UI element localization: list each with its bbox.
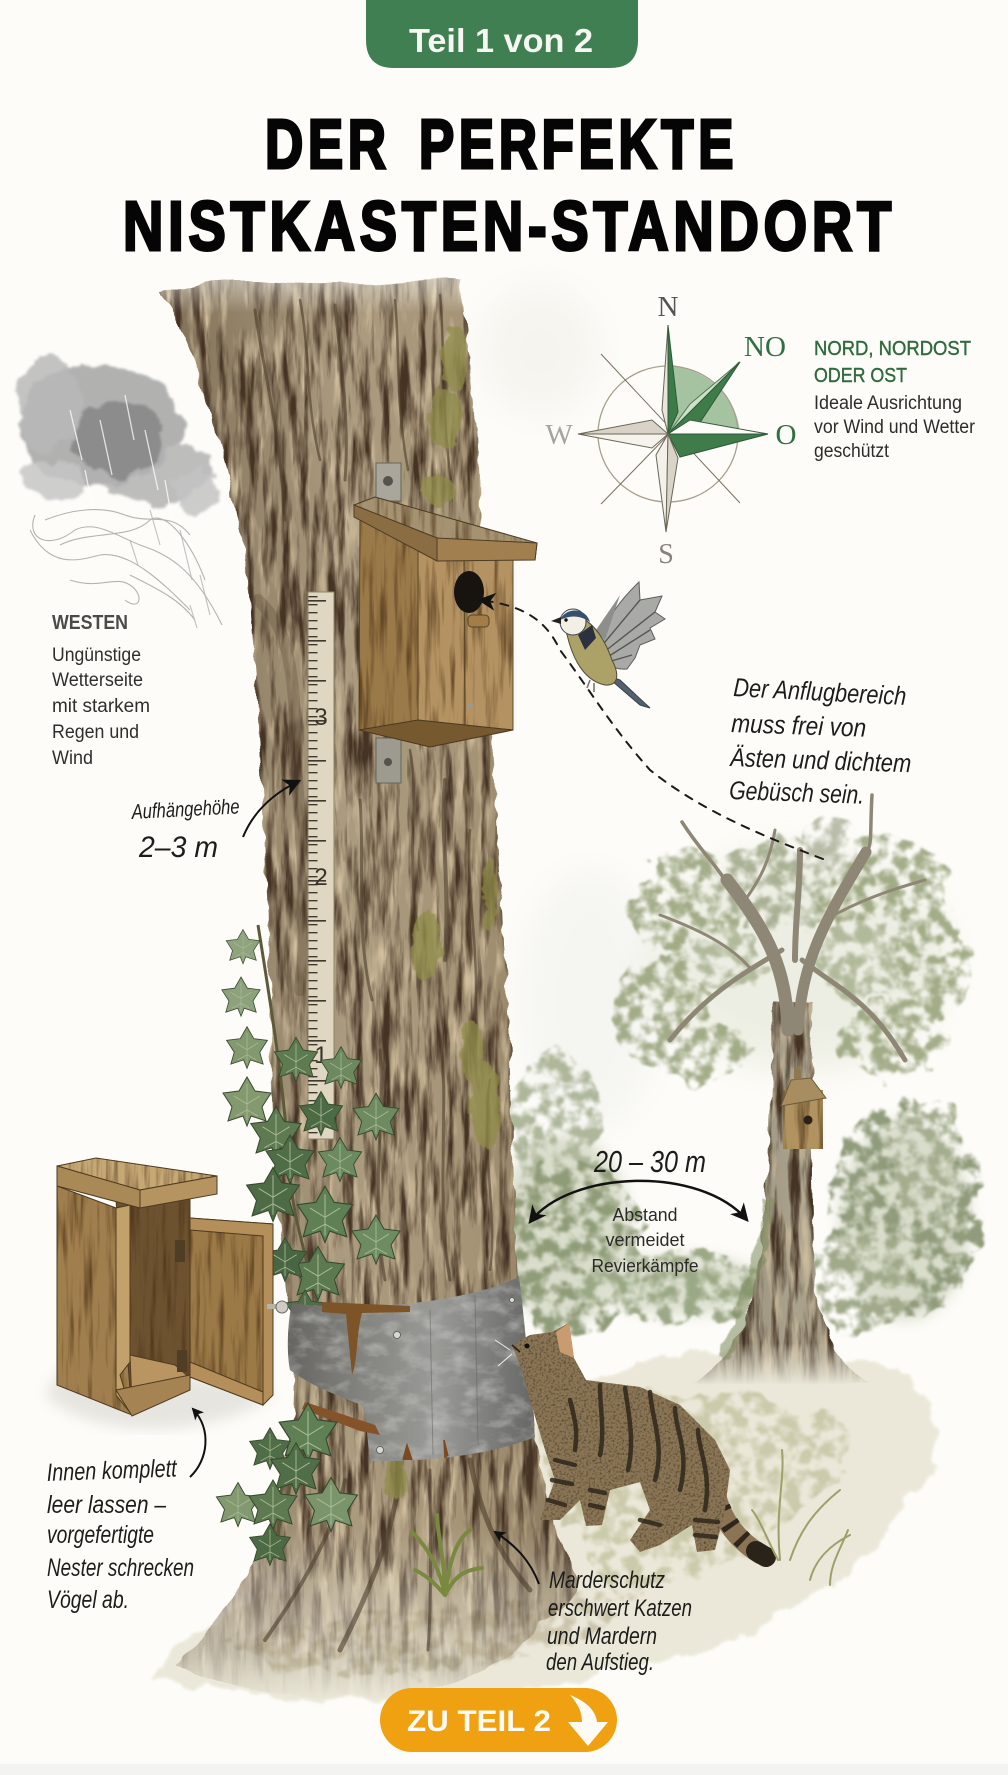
moss patches: [385, 328, 501, 1500]
note: marten guard with arrow: und Mardern: [547, 1623, 657, 1650]
metal marten guard: [288, 1277, 535, 1461]
part badge: [366, 0, 638, 68]
note: marten guard with arrow: [495, 1532, 692, 1676]
open door: [190, 1218, 273, 1405]
text: ideal orientation: [814, 338, 976, 462]
compass rose: [545, 291, 796, 570]
rain streaks: [70, 395, 172, 520]
cat stripes: [548, 1385, 718, 1537]
main nest box: [354, 463, 537, 783]
icon: arrow down: [568, 1695, 608, 1746]
distance arc with labels: vermeidet: [606, 1230, 684, 1250]
door hinge: [175, 1240, 187, 1372]
note: mounting height with arrow: [129, 781, 299, 864]
note: mounting height with arrow: Aufhängehöhe: [129, 795, 240, 824]
box roof: [57, 1158, 217, 1190]
tree canopy: [612, 818, 970, 1088]
base grass tuft: [412, 1515, 482, 1595]
note: keep empty with arrow: leer lassen –: [47, 1491, 167, 1519]
cardinal letters: O: [776, 419, 796, 451]
bottom bracket: [376, 738, 401, 783]
wing: [598, 582, 665, 669]
distance arc with labels: [530, 1144, 747, 1276]
cardinal letters: S: [658, 539, 674, 570]
head: [560, 609, 586, 635]
text: ideal orientation: Ideale Ausrichtung: [814, 393, 962, 414]
wind and rain cloud: [18, 357, 222, 628]
note: keep empty with arrow: vorgefertigte: [47, 1521, 154, 1549]
wind swirls: [30, 510, 222, 625]
note: approach area: muss frei von: [731, 708, 867, 743]
tree trunk and branches: [660, 795, 925, 1385]
text: west side: Ungünstige: [52, 645, 141, 666]
text: ideal orientation: NORD, NORDOST: [814, 338, 971, 360]
cloud: [18, 357, 219, 514]
door knob: [267, 1301, 288, 1313]
tail: [605, 675, 650, 708]
note: mounting height with arrow: 2–3 m: [138, 831, 218, 864]
note: marten guard with arrow: den Aufstieg.: [546, 1649, 654, 1676]
text: ideal orientation: ODER OST: [814, 365, 907, 387]
part badge: Teil 1 von 2: [409, 22, 593, 59]
body: [566, 618, 617, 685]
background haze: [480, 285, 950, 1130]
green sector: [668, 365, 740, 434]
cardinal letters: W: [545, 419, 573, 451]
underside: [359, 720, 513, 747]
foreground grasses: [752, 1450, 850, 1585]
side panel: [359, 520, 430, 730]
front panel: [418, 540, 513, 730]
distant bushes: [495, 1050, 981, 1340]
note: marten guard with arrow: erschwert Katzen: [548, 1595, 692, 1622]
entrance hole: [454, 571, 484, 613]
flight path dashed arrow: [480, 600, 823, 859]
text: ideal orientation: geschützt: [814, 441, 890, 462]
button: to part 2: [380, 1688, 617, 1752]
note: approach area: [728, 672, 912, 810]
bark furrows: [255, 295, 530, 1650]
small nest box: [781, 1068, 826, 1149]
top bracket: [376, 463, 401, 501]
cardinal letters: N: [658, 291, 679, 323]
roof: [354, 497, 537, 561]
note: approach area: Ästen und dichtem: [728, 742, 912, 778]
rings: [598, 366, 738, 502]
note: keep empty with arrow: [46, 1409, 205, 1614]
cardinal letters: NO: [744, 331, 786, 363]
text: west side: Wetterseite: [52, 670, 143, 691]
title: DER PERFEKTE: [265, 105, 738, 183]
text: west side: [52, 612, 150, 769]
main tree trunk: [160, 279, 577, 1700]
blue tit bird: [551, 582, 665, 708]
ivy below guard: [216, 1403, 357, 1565]
open nest box cutaway: [45, 1158, 288, 1429]
text: west side: Regen und: [52, 722, 139, 743]
text: west side: WESTEN: [52, 612, 128, 634]
ivy on trunk: [222, 925, 400, 1560]
text: west side: mit starkem: [52, 696, 150, 717]
note: keep empty with arrow: Innen komplett: [46, 1454, 178, 1487]
height ruler: [308, 592, 334, 1139]
cat body: [512, 1323, 730, 1552]
note: keep empty with arrow: Vögel ab.: [47, 1586, 129, 1614]
tabby cat: [495, 1323, 766, 1557]
ground wash: [150, 1347, 937, 1700]
cat tail: [712, 1470, 766, 1557]
button: to part 2: ZU TEIL 2: [407, 1705, 551, 1738]
feet: [587, 680, 594, 692]
distance arc with labels: Abstand: [612, 1205, 678, 1225]
distance arc with labels: 20 – 30 m: [593, 1144, 706, 1179]
box body: [57, 1186, 132, 1415]
points: [662, 325, 668, 434]
text: ideal orientation: vor Wind und Wetter: [814, 417, 976, 438]
text: west side: Wind: [52, 748, 93, 769]
inner cavity: [116, 1195, 190, 1415]
cat face: [495, 1323, 574, 1366]
distance arc with labels: Revierkämpfe: [592, 1256, 698, 1276]
note: keep empty with arrow: Nester schrecken: [47, 1554, 194, 1582]
height ruler: 3: [314, 704, 328, 731]
diagonal lines: [601, 354, 740, 504]
height ruler: 2: [314, 864, 328, 891]
note: approach area: Gebüsch sein.: [729, 775, 865, 810]
perch: [468, 615, 489, 627]
background tree with small nest box: [612, 795, 970, 1385]
note: marten guard with arrow: Marderschutz: [549, 1567, 665, 1594]
height ruler: 1: [314, 1042, 328, 1069]
title: [123, 105, 896, 265]
note: approach area: Der Anflugbereich: [733, 672, 907, 711]
cardinal letters: [545, 291, 796, 570]
